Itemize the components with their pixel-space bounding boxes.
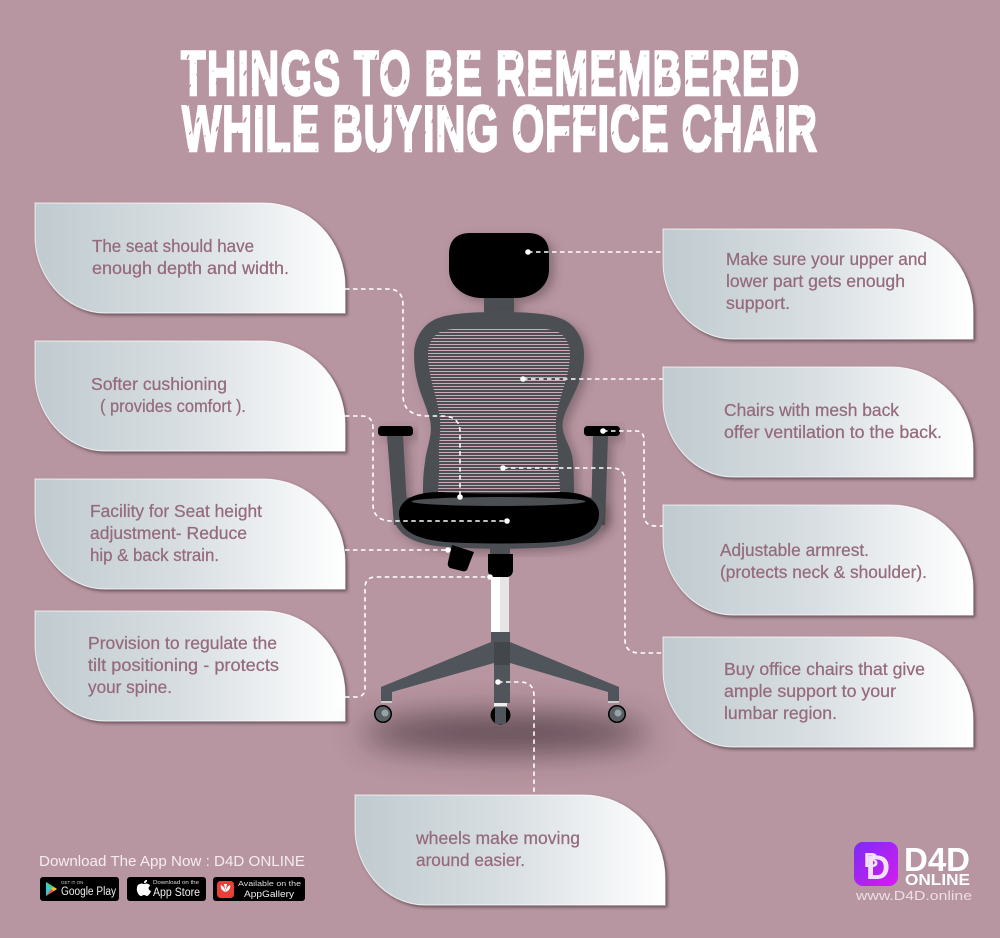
chair back frame and mesh xyxy=(414,312,584,500)
panel: tilt positioning: tilt positioning - protects xyxy=(88,655,279,675)
panel: adjustable armrest xyxy=(663,505,973,615)
title: WHILE BUYING OFFICE CHAIR xyxy=(182,93,817,165)
badge: App Store xyxy=(127,877,206,901)
panel: upper and lower support: Make sure your upper and xyxy=(726,249,927,269)
left wheel xyxy=(374,701,392,723)
panel: lumbar support: ample support to your xyxy=(724,681,896,701)
panel: wheels xyxy=(355,795,665,905)
panel: seat height adjustment: hip & back strain. xyxy=(90,545,219,565)
tilt lever xyxy=(448,545,474,571)
panel: tilt positioning: Provision to regulate the xyxy=(88,633,277,653)
badge: App Store: Download on the xyxy=(153,880,199,886)
panel: lumbar support: Buy office chairs that give xyxy=(724,659,925,679)
left armrest xyxy=(378,426,413,525)
D4D Online logo xyxy=(854,841,972,903)
centre wheel xyxy=(490,703,510,724)
D4D Online logo: ONLINE xyxy=(905,872,970,889)
badge: AppGallery: AppGallery xyxy=(244,889,294,900)
panel: wheels: around easier. xyxy=(416,850,525,870)
panel: softer cushioning: Softer cushioning xyxy=(91,374,227,394)
panel: mesh back: offer ventilation to the back. xyxy=(724,422,942,442)
panel: seat depth and width: The seat should have xyxy=(92,236,254,256)
panel: mesh back xyxy=(663,367,973,477)
title: THINGS TO BE REMEMBERED xyxy=(181,39,799,109)
star base xyxy=(381,632,619,703)
panel: seat height adjustment: Facility for Seat height xyxy=(90,501,262,521)
panel: upper and lower support: lower part gets enough xyxy=(726,271,905,291)
panel: lumbar support: lumbar region. xyxy=(724,703,837,723)
badge: AppGallery xyxy=(213,877,305,901)
panel: upper and lower support: support. xyxy=(726,293,790,313)
floor shadow xyxy=(360,713,650,753)
logo icon: D xyxy=(866,849,890,887)
panel: wheels: wheels make moving xyxy=(415,828,580,848)
panel: seat height adjustment xyxy=(35,479,345,589)
panel: seat depth and width xyxy=(35,203,345,313)
D4D Online logo: D4D xyxy=(904,841,970,878)
chair headrest xyxy=(449,233,549,314)
seat cushion xyxy=(393,492,604,549)
badge: Google Play: GET IT ON xyxy=(61,880,83,885)
panel: lumbar support xyxy=(663,637,973,747)
badge: App Store: App Store xyxy=(153,885,200,899)
panel: softer cushioning xyxy=(35,341,345,451)
panel: seat depth and width: enough depth and width. xyxy=(92,258,289,278)
panel: tilt positioning xyxy=(35,611,345,721)
callout lines and dots xyxy=(345,249,663,793)
gas lift xyxy=(488,547,513,632)
download heading: Download The App Now : D4D ONLINE xyxy=(39,854,305,870)
panel: mesh back: Chairs with mesh back xyxy=(724,400,899,420)
right wheel xyxy=(608,701,626,723)
panel: upper and lower support xyxy=(663,229,973,339)
right armrest xyxy=(584,426,620,525)
panel: tilt positioning: your spine. xyxy=(88,677,172,697)
panel: adjustable armrest: Adjustable armrest. xyxy=(720,540,869,560)
title xyxy=(178,39,822,165)
badge: Google Play xyxy=(40,877,119,901)
office chair illustration xyxy=(374,233,626,724)
panel: seat height adjustment: adjustment- Reduce xyxy=(90,523,247,543)
panel: adjustable armrest: (protects neck & shoulder). xyxy=(720,562,927,582)
D4D Online logo: www.D4D.online xyxy=(855,889,972,903)
badge: Google Play: Google Play xyxy=(61,886,116,898)
panel: softer cushioning: ( provides comfort ). xyxy=(100,396,246,416)
badge: AppGallery: Available on the xyxy=(238,881,301,888)
logo icon xyxy=(854,842,898,887)
logo icon: B xyxy=(864,850,878,872)
